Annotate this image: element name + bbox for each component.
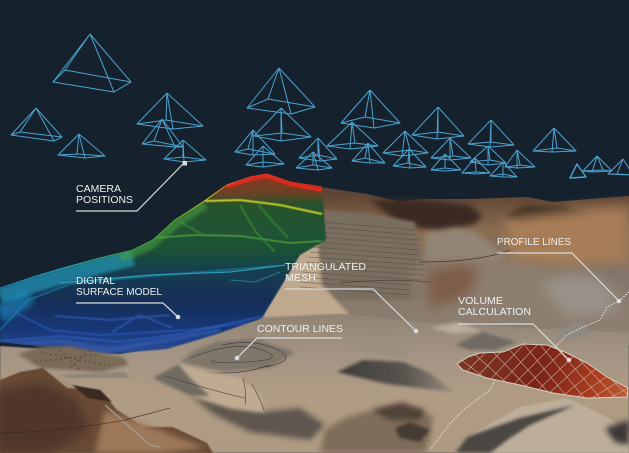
camera 6 (164, 140, 206, 162)
digital surface model (0, 174, 326, 354)
camera 21 (468, 120, 514, 147)
callout: camera positions: POSITIONS (76, 195, 133, 206)
callout: contour lines (235, 324, 343, 360)
callout: triangulated mesh: MESH (285, 273, 316, 284)
terrain: small piles (350, 322, 592, 357)
camera 2 (11, 108, 62, 141)
callout: profile lines: PROFILE LINES (497, 237, 571, 248)
camera 14 (327, 122, 378, 149)
camera 24 (505, 150, 535, 168)
camera 19 (431, 138, 471, 160)
camera 13 (296, 152, 332, 170)
camera 28 (583, 156, 612, 172)
camera 25 (490, 162, 517, 177)
camera pyramids (11, 34, 629, 178)
callout: camera positions (76, 161, 187, 211)
terrain: lower hills centre (320, 402, 433, 453)
callout: camera positions: CAMERA (76, 184, 121, 195)
terrain: rubble town area (18, 346, 128, 372)
callout: volume calculation (458, 296, 571, 362)
callout: triangulated mesh (285, 262, 418, 333)
terrain: ground plain (0, 314, 629, 453)
camera 26 (533, 128, 576, 152)
volume calculation mesh (456, 344, 628, 398)
terrain: lower brown mound (0, 368, 213, 453)
terrain: quarry rock face (260, 178, 629, 345)
callout: digital surface model (76, 276, 180, 319)
callout: triangulated mesh: TRIANGULATED (285, 262, 366, 273)
camera 16 (383, 131, 428, 156)
callout: digital surface model: SURFACE MODEL (76, 287, 162, 298)
camera 23 (462, 158, 490, 174)
camera 5 (142, 119, 183, 147)
camera 18 (412, 107, 464, 139)
camera 7 (247, 68, 315, 114)
camera 29 (608, 159, 629, 175)
camera 27 (570, 164, 586, 178)
camera 10 (246, 146, 284, 167)
terrain: contour mound (180, 338, 295, 373)
camera 22 (470, 146, 506, 165)
terrain: lower right mound (455, 398, 629, 453)
camera 15 (352, 143, 385, 163)
callout: volume calculation: CALCULATION (458, 307, 531, 318)
camera 9 (235, 130, 275, 155)
camera 11 (341, 90, 400, 128)
callout: volume calculation: VOLUME (458, 296, 503, 307)
camera 20 (431, 154, 461, 171)
camera 1 (53, 34, 131, 92)
profile line: dotted path (430, 292, 629, 450)
camera 4 (137, 93, 203, 129)
camera 17 (393, 149, 426, 168)
callout: digital surface model: DIGITAL (76, 276, 115, 287)
camera 12 (299, 138, 337, 161)
callout: profile lines (497, 237, 621, 303)
camera 8 (254, 108, 311, 141)
terrain: dark pile (337, 360, 453, 392)
camera 3 (58, 134, 105, 158)
callout: contour lines: CONTOUR LINES (257, 324, 343, 335)
terrain: light mound (152, 364, 325, 440)
